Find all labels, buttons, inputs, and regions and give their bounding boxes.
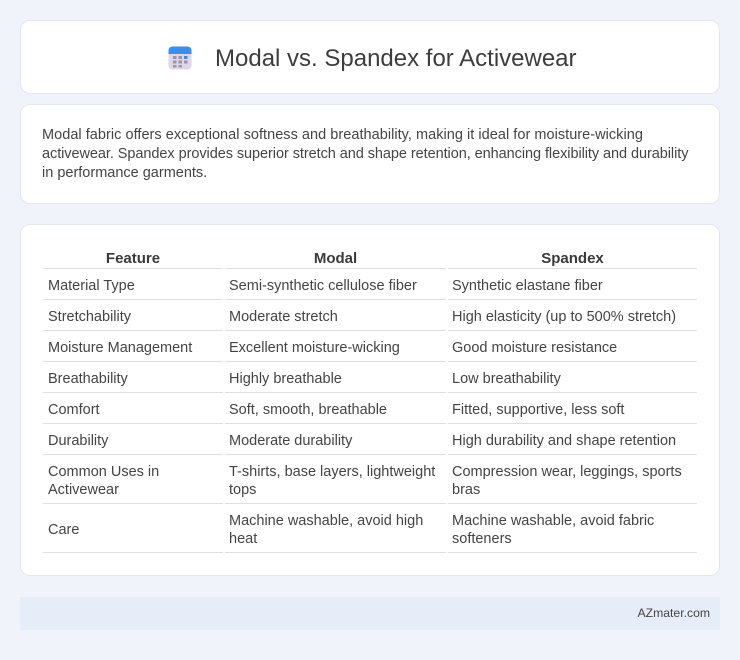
row: Breathability: Low breathability	[452, 371, 561, 387]
summary text	[42, 127, 688, 181]
row: Common Uses in Activewear: Activewear	[48, 482, 119, 498]
row: Moisture Management	[48, 340, 617, 356]
title text: Modal vs. Spandex for Activewear	[215, 45, 577, 72]
row: Comfort: Comfort	[48, 402, 100, 418]
row: Moisture Management: Excellent moisture-wicking	[229, 340, 400, 356]
panel: summary	[20, 104, 720, 204]
row: Durability: High durability and shape retention	[452, 433, 676, 449]
footer text: AZmater.com	[638, 606, 710, 620]
row: Comfort: Fitted, supportive, less soft	[452, 402, 624, 418]
row: Comfort: Soft, smooth, breathable	[229, 402, 387, 418]
row: Stretchability: Stretchability	[48, 309, 131, 325]
row: Care: softeners	[452, 531, 512, 547]
row: Moisture Management: Good moisture resistance	[452, 340, 617, 356]
row: Common Uses in Activewear: tops	[229, 482, 256, 498]
row: Moisture Management: Moisture Management	[48, 340, 192, 356]
row: Durability: Durability	[48, 433, 108, 449]
row: Care: Machine washable, avoid high	[229, 513, 423, 529]
row: Durability	[48, 433, 676, 449]
header: Feature: Feature	[106, 250, 160, 267]
row: Common Uses in Activewear: Common Uses in	[48, 464, 159, 480]
row: Care: Care	[48, 522, 79, 538]
row: Common Uses in Activewear: Compression wear, leggings, sports	[452, 464, 682, 480]
row: Breathability: Breathability	[48, 371, 128, 387]
row: Stretchability	[48, 309, 676, 325]
header: Modal: Modal	[314, 250, 357, 267]
summary text: in performance garments.	[42, 165, 207, 181]
icon: calendar	[168, 46, 192, 70]
row: Material Type	[48, 278, 603, 294]
row: Material Type: Semi-synthetic cellulose fiber	[229, 278, 417, 294]
row: Stretchability: High elasticity (up to 500% stretch)	[452, 309, 676, 325]
panel: comparison table	[20, 224, 720, 576]
row: Durability: Moderate durability	[229, 433, 352, 449]
row: Care: heat	[229, 531, 257, 547]
row: Common Uses in Activewear	[48, 464, 682, 498]
header: Spandex: Spandex	[541, 250, 604, 267]
summary text: activewear. Spandex provides superior stretch and shape retention, enhancing flexibility and durability	[42, 146, 688, 162]
row: Care: Machine washable, avoid fabric	[452, 513, 654, 529]
row: Material Type: Synthetic elastane fiber	[452, 278, 603, 294]
row: Common Uses in Activewear: bras	[452, 482, 480, 498]
row: Care	[48, 513, 654, 547]
panel: title	[20, 20, 720, 94]
row: Stretchability: Moderate stretch	[229, 309, 338, 325]
row: Comfort	[48, 402, 624, 418]
row: Breathability	[48, 371, 561, 387]
row: Common Uses in Activewear: T-shirts, base layers, lightweight	[229, 464, 435, 480]
footer bar	[20, 597, 720, 630]
row: Material Type: Material Type	[48, 278, 135, 294]
row: Breathability: Highly breathable	[229, 371, 342, 387]
summary text: Modal fabric offers exceptional softness and breathability, making it ideal for moisture-wicking	[42, 127, 643, 143]
